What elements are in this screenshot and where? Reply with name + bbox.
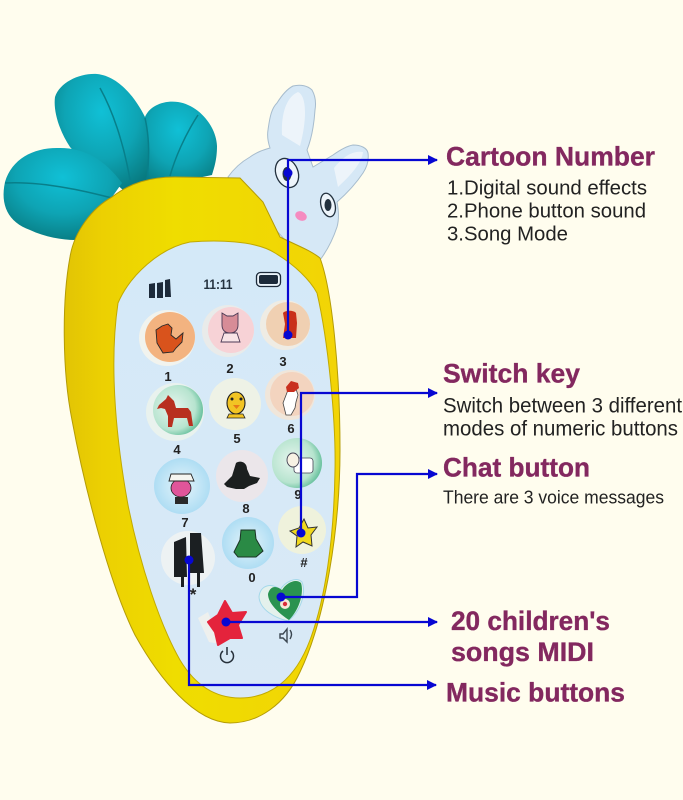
- button: 0 frog: 0: [248, 570, 256, 585]
- button: 1 rooster: 1: [164, 369, 172, 384]
- callout: switch key: Switch key: [443, 358, 580, 388]
- callout: switch key: Switch between 3 different: [443, 394, 682, 418]
- arrow: children's songs: [222, 618, 437, 626]
- button: 4 horse: [146, 383, 204, 457]
- button: 3 figure: 3: [279, 354, 287, 369]
- arrow: music buttons: [184, 556, 436, 685]
- callout: cartoon number: Cartoon Number: [446, 142, 655, 172]
- button: 6 hen: 6: [287, 421, 295, 436]
- button: 6 hen: [265, 370, 315, 436]
- callout: switch key: [443, 358, 682, 440]
- button: 2 cat: 2: [226, 361, 234, 376]
- status bar: 11:11: [204, 276, 233, 292]
- callout: children's songs: 20 children's: [451, 606, 610, 636]
- callout: cartoon number: 3.Song Mode: [447, 222, 568, 246]
- button: 7 cow: [154, 458, 210, 530]
- carrot body: [64, 177, 340, 723]
- status bar: [149, 272, 280, 298]
- button: 0 frog: [222, 517, 274, 585]
- callout: children's songs: songs MIDI: [451, 637, 594, 667]
- button: star key: [161, 531, 215, 604]
- button: 8 shadow figure: 8: [242, 501, 250, 516]
- callout: chat button: Chat button: [443, 452, 590, 482]
- callout: cartoon number: [446, 142, 655, 246]
- button: hash star: #: [300, 555, 308, 570]
- arrow: switch key: [296, 393, 437, 538]
- phone screen panel: [114, 241, 335, 698]
- button: 9 sheep: 9: [294, 487, 302, 502]
- button: 5 chick: [209, 378, 261, 446]
- button: 5 chick: 5: [233, 431, 241, 446]
- callout: chat button: There are 3 voice messages: [443, 488, 664, 508]
- button: 1 rooster: [139, 310, 195, 384]
- button: 2 cat: [202, 305, 254, 376]
- button: 3 figure: [260, 300, 310, 369]
- button: 7 cow: 7: [181, 515, 189, 530]
- button: 9 sheep: [272, 438, 322, 502]
- button: star key: *: [190, 585, 197, 604]
- callout: music buttons: Music buttons: [446, 678, 625, 708]
- arrow: cartoon number: [284, 159, 437, 340]
- callout: cartoon number: 2.Phone button sound: [447, 200, 646, 222]
- toy phone: [4, 74, 368, 723]
- callout: children's songs: [451, 606, 610, 667]
- callout: chat button: [443, 452, 664, 508]
- bunny: [228, 85, 368, 260]
- button: 4 horse: 4: [173, 442, 181, 457]
- button: red star: [198, 601, 246, 663]
- button: heart: [259, 580, 303, 642]
- callout: switch key: modes of numeric buttons: [443, 418, 678, 440]
- callout: cartoon number: 1.Digital sound effects: [447, 176, 647, 200]
- arrow: chat button: [276, 474, 437, 602]
- button: hash star: [278, 506, 326, 570]
- carrot leaves: [4, 74, 217, 240]
- button: 8 shadow figure: [216, 450, 268, 516]
